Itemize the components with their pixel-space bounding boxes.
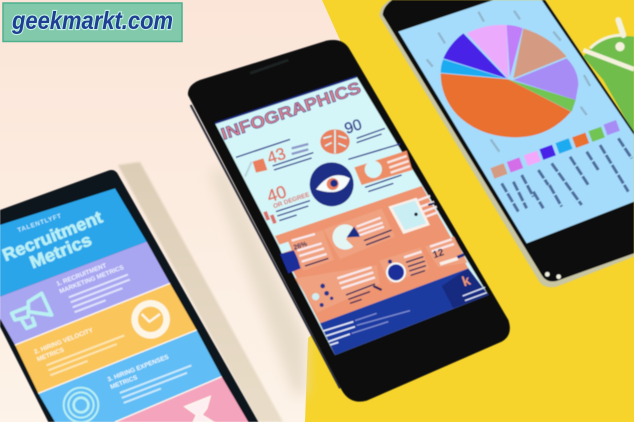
legend labels <box>502 138 632 212</box>
panel: centre phone infographic <box>188 40 510 402</box>
section 3 text <box>107 347 195 405</box>
screen top edge <box>215 77 357 123</box>
icon: megaphone <box>12 293 52 328</box>
android mascot <box>583 20 634 133</box>
title: INFOGRAPHICS: INFOGRAPHICS <box>218 78 363 144</box>
watermark: geekmarkt.com badge <box>3 3 182 42</box>
section 1 text: MARKETING METRICS <box>58 264 125 295</box>
heading: Recruitment Metrics: Metrics <box>27 229 94 272</box>
panel: orange section <box>275 186 468 323</box>
stat: 43 <box>264 144 313 170</box>
speaker <box>250 60 288 73</box>
phone body <box>188 40 510 402</box>
shadow: centre phone cast shadow <box>210 170 305 395</box>
phone face <box>383 0 634 282</box>
footer: dark logo block <box>442 268 488 308</box>
stat: 40: 40 <box>264 181 289 206</box>
phone body <box>0 170 258 422</box>
icon: eye <box>310 162 354 206</box>
section 1 text: 1. RECRUITMENT <box>56 262 108 288</box>
stat: 90 <box>342 116 385 143</box>
card: 26 percent: 26% <box>293 240 309 252</box>
card: 12 percent <box>425 237 467 267</box>
icon: trophy hourglass <box>185 397 213 422</box>
stat: 90: 90 <box>342 116 364 138</box>
panel: blue footer <box>320 268 488 355</box>
section 3 text: METRICS <box>109 374 139 391</box>
section 3 text: 3. HIRING EXPENSES <box>107 354 170 384</box>
screen <box>215 77 488 355</box>
camera dots <box>545 272 561 279</box>
panel: right phone pie chart <box>379 0 634 287</box>
pink band <box>115 377 248 422</box>
section 2 text: METRICS <box>36 347 65 363</box>
badge text: geekmarkt.com <box>11 7 173 35</box>
shadow: left phone cast shadow <box>118 162 283 422</box>
brand label: TALENTLYFT <box>17 213 63 234</box>
phone frame <box>379 0 634 287</box>
caption: left heading <box>236 139 290 157</box>
icon: clock <box>131 300 170 339</box>
footer: logo k: k <box>460 272 473 290</box>
section 1 text <box>56 256 134 315</box>
stat: 40 <box>264 181 311 223</box>
card: 12 percent: 12 <box>431 247 446 261</box>
purple band <box>0 242 170 345</box>
panel: top right card <box>348 144 412 192</box>
card: network <box>295 265 382 313</box>
card: pie <box>323 208 395 259</box>
stat: 40: OR DEGREE <box>272 191 311 210</box>
footer: credits <box>323 311 410 345</box>
legend swatches <box>490 120 620 179</box>
blue band <box>38 330 222 422</box>
stat: 43: 43 <box>264 144 288 168</box>
pie chart <box>441 25 578 137</box>
header band <box>0 188 147 297</box>
card: navy box <box>280 250 301 273</box>
section 2 text: 2. HIRING VELOCITY <box>33 327 95 356</box>
screen <box>398 0 634 243</box>
section 2 text <box>33 317 128 378</box>
footer: logo rule <box>463 287 487 301</box>
card: map document <box>388 196 438 234</box>
yellow band <box>15 283 197 393</box>
card: 26 percent <box>289 230 334 271</box>
card: light corner box <box>278 242 292 253</box>
icon: bar figures <box>245 158 267 177</box>
icon: target coin <box>64 388 98 422</box>
band dividers <box>15 283 222 422</box>
phone edge highlight <box>191 105 340 388</box>
background: yellow surface <box>305 0 634 422</box>
heading: Recruitment Metrics: Recruitment <box>0 207 105 265</box>
badge background <box>3 3 182 42</box>
icon: brain <box>320 129 350 154</box>
panel: left phone recruitment metrics <box>0 170 258 422</box>
card: stopwatch <box>379 247 429 284</box>
pie axis labels <box>427 11 590 152</box>
